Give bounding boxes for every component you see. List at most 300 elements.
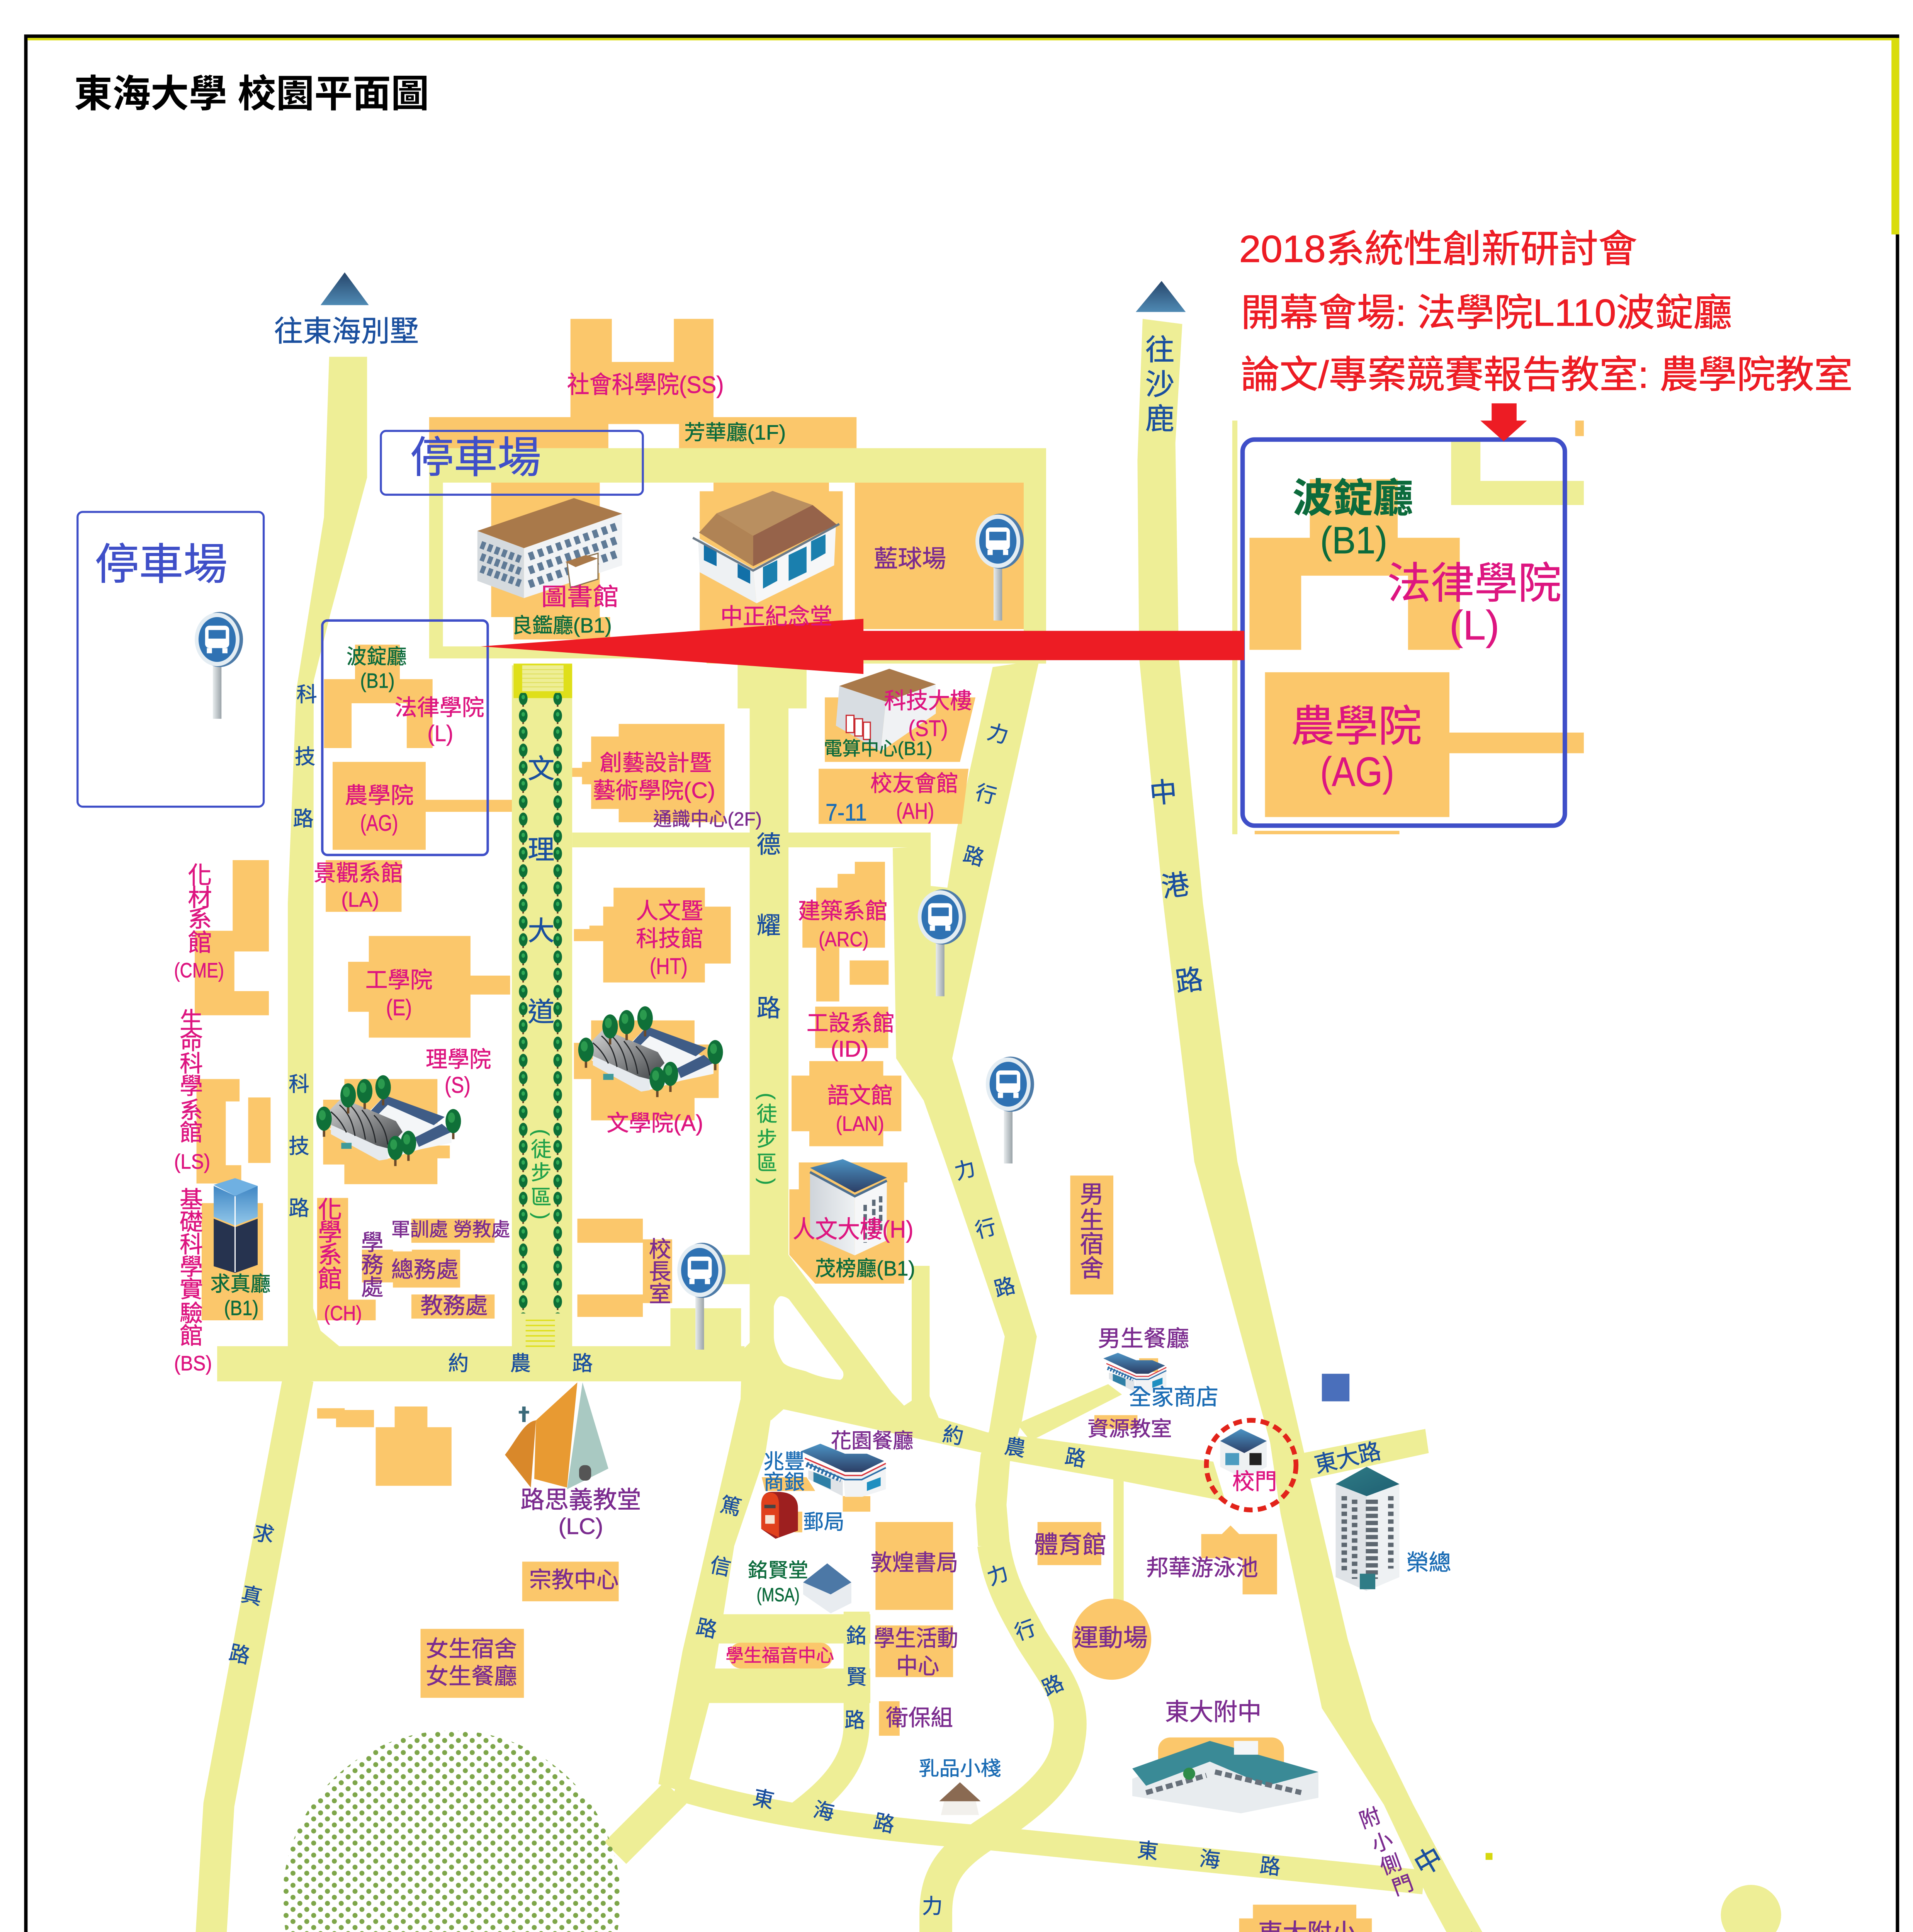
label: 人文暨: 人文暨 bbox=[636, 899, 703, 924]
label: 化學系館: 化 bbox=[318, 1197, 342, 1224]
label: ST: (ST) bbox=[908, 716, 948, 741]
road name: 徒步區 avenue: 徒 bbox=[531, 1138, 552, 1161]
label: CME: (CME) bbox=[174, 959, 224, 982]
label: 化材系館: 館 bbox=[188, 929, 212, 956]
label: 邦華游泳池: 邦華游泳池 bbox=[1146, 1556, 1258, 1580]
road name: 篤信路: 路 bbox=[694, 1616, 719, 1642]
label: 男生宿舍: 舍 bbox=[1080, 1255, 1104, 1282]
building: 軍訓處 bbox=[411, 1219, 494, 1243]
icon: 文學院 temple bbox=[578, 1006, 723, 1097]
icon: 銘賢堂 bbox=[803, 1563, 851, 1613]
road name: 銘賢路: 賢 bbox=[846, 1666, 867, 1689]
road: 文理大道 bbox=[512, 665, 572, 1351]
label: AH: (AH) bbox=[896, 799, 934, 824]
icon: 榮總 tower bbox=[1335, 1467, 1400, 1591]
label: 學生福音中心: 學生福音中心 bbox=[725, 1645, 834, 1665]
building: 學生福音中心 bbox=[729, 1643, 832, 1668]
road: 力行路 north section bbox=[893, 660, 1039, 1546]
label: 良鑑廳: 良鑑廳(B1) bbox=[512, 614, 612, 637]
road: 校長室 spur bbox=[670, 1308, 741, 1351]
label: 波錠廳 B1: (B1) bbox=[360, 670, 395, 692]
road name: 力行路 top: 力 bbox=[985, 721, 1011, 748]
building: 花園餐廳 bbox=[843, 1496, 870, 1512]
road name: 科技路 south: 路 bbox=[289, 1197, 309, 1220]
road name: 徒步區 德耀路: 步 bbox=[756, 1128, 777, 1151]
building: 敦煌書局 bbox=[875, 1522, 953, 1610]
building: 中正紀念堂 bbox=[700, 483, 843, 633]
label: 基礎科學實驗館: 館 bbox=[180, 1323, 203, 1349]
label: 科技大樓: 科技大樓 bbox=[884, 689, 972, 713]
road: 東海路 bbox=[676, 1787, 1424, 1882]
label: 停車場 left: 停車場 bbox=[95, 540, 228, 588]
label: 法律學院: 法律學院 bbox=[395, 696, 484, 720]
building and place labels bbox=[95, 315, 1685, 1932]
building: 人文大樓 bbox=[789, 1162, 907, 1284]
building: 景觀系館 bbox=[326, 860, 401, 912]
label: 藍球場: 藍球場 bbox=[874, 546, 946, 573]
building: 兆豐商銀 bbox=[762, 1477, 815, 1491]
road name: 徒步區 avenue: ) bbox=[530, 1213, 552, 1219]
road name: 東海路 east: 海 bbox=[1198, 1847, 1222, 1872]
road name: 篤信路 bbox=[694, 1493, 743, 1642]
building: 教堂旁 hall bbox=[376, 1406, 452, 1486]
icon: 求真廳 tower bbox=[214, 1178, 258, 1273]
label: 化學系館: 學 bbox=[318, 1219, 342, 1246]
decorative yellow square bbox=[1486, 1853, 1492, 1860]
building: 總務處 bbox=[362, 1250, 460, 1287]
icon: 東大附中 school bbox=[1132, 1741, 1318, 1813]
road name: 力行路 second: 力 bbox=[952, 1156, 978, 1184]
label: LS: (LS) bbox=[174, 1150, 210, 1173]
building: 建築系館 annex bbox=[849, 961, 889, 985]
label: 學務處: 學 bbox=[361, 1230, 384, 1255]
road name: 徒步區 avenue bbox=[530, 1129, 552, 1219]
road name: 約農路 west: 約 bbox=[448, 1352, 469, 1375]
building: 理學院 bbox=[323, 1079, 450, 1184]
road name: 約農路 west: 路 bbox=[572, 1352, 593, 1375]
road: 德耀路 side spur bbox=[717, 1255, 750, 1284]
road: 約農路 east and diagonal bbox=[741, 1255, 1225, 1501]
label: 男生宿舍: 宿 bbox=[1080, 1231, 1104, 1258]
road name: 力行路 second bbox=[952, 1156, 1018, 1301]
callout: conference information bbox=[1239, 228, 1853, 396]
label: 學務處: 處 bbox=[361, 1275, 384, 1300]
label: 文學院: 文學院(A) bbox=[607, 1111, 703, 1136]
inset label 農學院: 農學院 bbox=[1291, 702, 1422, 750]
callout line: paper rooms: 論文/專案競賽報告教室: 農學院教室 bbox=[1241, 354, 1853, 396]
label: 附小側門: 小 bbox=[1369, 1828, 1396, 1857]
label: 郵局: 郵局 bbox=[803, 1511, 844, 1534]
road name: 徒步區 德耀路: ( bbox=[756, 1093, 778, 1100]
building: 語文館 bbox=[792, 1061, 901, 1146]
label: 基礎科學實驗館: 驗 bbox=[180, 1300, 203, 1327]
building: 運動場 bbox=[1072, 1599, 1151, 1680]
label: 生命科學系館: 館 bbox=[180, 1119, 203, 1146]
road name: 文理大道: 文 bbox=[528, 754, 554, 784]
label: 7-11: 7-11 bbox=[826, 799, 867, 826]
label: 體育館: 體育館 bbox=[1034, 1531, 1106, 1558]
road name: 力行路 second: 行 bbox=[973, 1215, 999, 1243]
road name: 徒步區 avenue: ( bbox=[530, 1129, 552, 1136]
inset left edge road bbox=[1232, 420, 1237, 834]
inset 農學院 footprint bbox=[1265, 672, 1584, 817]
road name: 力行路 third bbox=[984, 1561, 1067, 1701]
label: 法律學院 L: (L) bbox=[427, 721, 453, 746]
road name: 東海路 east: 路 bbox=[1259, 1854, 1282, 1879]
label: 語文館: 語文館 bbox=[827, 1083, 893, 1108]
label: 基礎科學實驗館: 科 bbox=[180, 1231, 203, 1258]
label: 波錠廳: 波錠廳 bbox=[347, 645, 407, 668]
文理大道 head plaza bbox=[513, 663, 572, 698]
label: 宗教中心: 宗教中心 bbox=[529, 1568, 619, 1592]
icon: 中正紀念堂 bbox=[693, 491, 839, 603]
road: 篤信路 bbox=[658, 1400, 771, 1793]
label: 中正紀念堂: 中正紀念堂 bbox=[720, 604, 832, 629]
road name: 徒步區 avenue: 步 bbox=[531, 1162, 552, 1184]
building: 衛保組 bbox=[879, 1701, 900, 1736]
building: 生命科學系館 bbox=[197, 1079, 241, 1184]
road: 銘賢堂 south lane bbox=[686, 1682, 870, 1690]
building: 創藝設計暨藝術學院 bbox=[572, 724, 725, 822]
right yellow accent bar bbox=[1891, 38, 1899, 235]
icon: 理學院 temple bbox=[316, 1075, 461, 1166]
label: 建築系館: 建築系館 bbox=[798, 899, 888, 924]
label: 學務處: 務 bbox=[361, 1253, 384, 1277]
buildings: orange footprints bbox=[195, 319, 1372, 1932]
decorative blue square bbox=[1322, 1374, 1349, 1401]
road name: 力行路 fourth: 力 bbox=[922, 1895, 943, 1918]
road: 通識中心 connector bbox=[572, 833, 931, 847]
road name: 東海路 east bbox=[1136, 1839, 1282, 1879]
road name: 求真路 bbox=[227, 1521, 276, 1668]
label: 求真廳: 求真廳 bbox=[210, 1273, 270, 1296]
building: 文學院 bbox=[574, 1020, 719, 1121]
building: 圖書館 bbox=[491, 483, 610, 639]
building: 邦華游泳池 bbox=[1201, 1526, 1277, 1594]
road name: 德耀路: 路 bbox=[756, 995, 781, 1022]
road name: 科技路 south: 技 bbox=[289, 1135, 309, 1158]
road name: 科技路 south: 科 bbox=[289, 1073, 309, 1095]
label: 化學系館: 系 bbox=[318, 1242, 342, 1268]
building: 資源教室 bbox=[1094, 1415, 1137, 1429]
label: 商銀: 商銀 bbox=[763, 1471, 805, 1494]
road: 往東海別墅 / 科技路 bbox=[288, 357, 367, 1351]
inset label AG: (AG) bbox=[1320, 748, 1394, 795]
building: 校友會館 bbox=[819, 769, 968, 824]
road name: 往沙鹿: 鹿 bbox=[1145, 402, 1174, 435]
label: 基礎科學實驗館: 礎 bbox=[180, 1209, 203, 1235]
decorative sun circle bbox=[1721, 1885, 1781, 1932]
road name: 東海路 west: 海 bbox=[811, 1798, 836, 1825]
icon: 男生餐廳 bbox=[1103, 1353, 1166, 1392]
label: 教務處: 教務處 bbox=[421, 1294, 488, 1318]
road name: 徒步區 德耀路: 區 bbox=[756, 1152, 777, 1175]
label: 學生活動: 學生活動 bbox=[874, 1626, 958, 1651]
label: 景觀系館: 景觀系館 bbox=[314, 861, 403, 886]
road name: 力行路 second: 路 bbox=[992, 1274, 1018, 1301]
icon: bus stop 校長室 bbox=[677, 1243, 725, 1350]
inset label 法律學院: 法律學院 bbox=[1387, 559, 1561, 607]
building: 體育館 bbox=[1038, 1522, 1101, 1565]
label: BS: (BS) bbox=[174, 1352, 212, 1375]
label: 化材系館: 化 bbox=[188, 862, 212, 889]
building: 學生活動中心 bbox=[875, 1626, 953, 1677]
road: 約農路 west bbox=[217, 1346, 744, 1381]
label: LC: (LC) bbox=[558, 1514, 603, 1539]
label: 附小側門: 門 bbox=[1389, 1871, 1417, 1900]
road island bbox=[774, 1296, 843, 1380]
roads network bbox=[200, 319, 1753, 1932]
icon: bus stop 建築 bbox=[918, 889, 966, 996]
building: 法學院 small bbox=[324, 645, 433, 748]
building: 教務處 bbox=[411, 1294, 494, 1319]
road name: 約農路 west: 農 bbox=[510, 1352, 531, 1375]
label: 生命科學系館: 系 bbox=[180, 1097, 203, 1123]
icon: bus stop basketball bbox=[975, 514, 1024, 621]
road name: 中港路 south: 中 bbox=[1409, 1841, 1448, 1882]
label: 校長室: 長 bbox=[649, 1260, 671, 1284]
label: 校長室: 校 bbox=[649, 1237, 671, 1262]
label: 東大附中: 東大附中 bbox=[1165, 1699, 1262, 1726]
icon: 乳品小棧 bbox=[939, 1782, 980, 1815]
icon: bus stop 力行路 bbox=[986, 1057, 1034, 1163]
label: 停車場 top: 停車場 bbox=[410, 433, 541, 481]
label: 農學院: 農學院 bbox=[345, 784, 414, 808]
label: 附小側門: 附 bbox=[1356, 1804, 1384, 1833]
dotted green area bbox=[283, 1731, 620, 1932]
road name: 中港路 south bbox=[1409, 1841, 1536, 1932]
icon: 路思義教堂 bbox=[505, 1383, 608, 1489]
inset label L: (L) bbox=[1449, 602, 1499, 648]
road name: 東海路 west bbox=[751, 1786, 897, 1837]
road name: 篤信路: 信 bbox=[708, 1553, 733, 1580]
inset road L bbox=[1451, 438, 1584, 505]
top yellow rule bbox=[27, 38, 1892, 40]
label: 基礎科學實驗館: 學 bbox=[180, 1254, 203, 1280]
label: ID: (ID) bbox=[831, 1037, 868, 1062]
label: 圖書館: 圖書館 bbox=[541, 583, 619, 611]
building: 工設系館 bbox=[815, 1007, 888, 1048]
road name: 往沙鹿: 往 bbox=[1145, 333, 1174, 366]
callout line: opening venue: 開幕會場: 法學院L110波錠廳 bbox=[1241, 291, 1732, 334]
road: 中港路 bbox=[1137, 319, 1753, 1932]
building: 化學系館 bbox=[317, 1198, 376, 1320]
label: 生命科學系館: 科 bbox=[180, 1050, 203, 1077]
building: 教堂旁 small annex bbox=[317, 1408, 374, 1427]
title: 東海大學 校園平面圖 bbox=[74, 73, 429, 115]
road name: 徒步區 德耀路 bbox=[756, 1093, 778, 1185]
label: 通識中心: 通識中心(2F) bbox=[653, 809, 762, 830]
label: HT: (HT) bbox=[650, 954, 688, 979]
road name: 求真路: 真 bbox=[239, 1583, 264, 1609]
label: ARC: (ARC) bbox=[819, 928, 868, 951]
road name: 科技路 north: 路 bbox=[293, 807, 314, 830]
label: 花園餐廳: 花園餐廳 bbox=[831, 1430, 913, 1452]
icon: 花園餐廳 bbox=[801, 1444, 886, 1497]
red down arrow bbox=[1480, 403, 1527, 441]
label: 榮總: 榮總 bbox=[1406, 1551, 1451, 1575]
road name: 中港路 north bbox=[1148, 776, 1205, 998]
road name: 力行路 top: 行 bbox=[973, 781, 999, 808]
road: 求真路 bbox=[200, 1379, 956, 1932]
label: 往東海別墅: 往東海別墅 bbox=[274, 315, 419, 348]
road name: 銘賢路: 路 bbox=[844, 1709, 865, 1731]
label: 化材系館: 系 bbox=[188, 905, 212, 932]
building: 女生宿舍 bbox=[421, 1629, 524, 1698]
label: 校長室: 室 bbox=[649, 1282, 671, 1307]
label: 女生餐廳: 女生餐廳 bbox=[426, 1664, 517, 1689]
road name labels bbox=[227, 333, 1760, 1932]
road name: 力行路 third: 路 bbox=[1039, 1671, 1067, 1701]
inset label 波錠廳: 波錠廳 bbox=[1293, 476, 1413, 520]
label: 總務處: 總務處 bbox=[391, 1257, 459, 1282]
label: LA: (LA) bbox=[341, 888, 379, 911]
label: 男生餐廳: 男生餐廳 bbox=[1098, 1327, 1189, 1351]
road: 圓形綠地 spur bbox=[615, 1793, 676, 1853]
road name: 文理大道: 大 bbox=[528, 916, 554, 946]
road name: 中港路 north: 路 bbox=[1173, 964, 1205, 998]
road name: 力行路 third: 力 bbox=[984, 1561, 1011, 1590]
building: 基礎科學實驗館 bbox=[202, 1203, 263, 1320]
label: 基礎科學實驗館: 基 bbox=[180, 1187, 203, 1213]
road name: 求真路: 求 bbox=[251, 1521, 276, 1548]
label: 生命科學系館: 生 bbox=[180, 1007, 203, 1034]
label: 銘賢堂: 銘賢堂 bbox=[748, 1560, 808, 1582]
building: 人文暨科技館 bbox=[574, 888, 731, 983]
label: E: (E) bbox=[386, 995, 412, 1020]
icon: library bbox=[477, 498, 622, 598]
label: 電算中心: 電算中心(B1) bbox=[824, 738, 933, 759]
road name: 文理大道: 道 bbox=[528, 997, 554, 1027]
label: 資源教室: 資源教室 bbox=[1087, 1418, 1172, 1440]
road: 運動場 spur bbox=[1113, 1479, 1124, 1608]
road name: 科技路 north: 科 bbox=[296, 683, 317, 706]
inset orange tick bbox=[1575, 420, 1584, 436]
label: 工設系館: 工設系館 bbox=[807, 1011, 894, 1036]
label: 農學院 AG: (AG) bbox=[360, 811, 398, 836]
road name: 銘賢路: 銘 bbox=[846, 1624, 867, 1647]
road: 校區外環 bbox=[429, 448, 1046, 663]
label: 軍訓處 勞教處: 軍訓處 勞教處 bbox=[391, 1219, 510, 1240]
building: 東大附小 bbox=[1239, 1905, 1372, 1932]
road: 力行路 middle bbox=[936, 1544, 1070, 1932]
inset 法學院 footprint bbox=[1249, 479, 1460, 650]
building: 社會科學院 bbox=[429, 319, 856, 448]
label: 基礎科學實驗館: 實 bbox=[180, 1276, 203, 1303]
road name: 力行路 third: 行 bbox=[1012, 1616, 1039, 1645]
icon: 郵筒 bbox=[761, 1492, 798, 1539]
road name: 中港路 north: 中 bbox=[1148, 776, 1178, 810]
road: 男生餐廳 spur bbox=[1017, 1384, 1122, 1441]
label: MSA: (MSA) bbox=[756, 1585, 800, 1605]
building: 男生宿舍 bbox=[1070, 1175, 1113, 1294]
parking box: top bbox=[381, 431, 643, 495]
icon: north triangle to Shalu bbox=[1136, 281, 1186, 312]
road name: 徒步區 avenue: 區 bbox=[531, 1186, 552, 1209]
road name: 往沙鹿: 沙 bbox=[1145, 368, 1174, 401]
文理大道 tree rows bbox=[517, 693, 565, 1313]
road name: 篤信路: 篤 bbox=[718, 1493, 743, 1520]
label: 芳華廳: 芳華廳(1F) bbox=[684, 422, 786, 444]
label: CH: (CH) bbox=[324, 1302, 362, 1325]
label: 男生宿舍: 男 bbox=[1080, 1181, 1104, 1208]
road: 東大路 bbox=[1303, 1429, 1429, 1479]
label: 求真廳 B1: (B1) bbox=[224, 1297, 258, 1320]
inset map: 法學院 農學院 bbox=[1232, 420, 1584, 834]
callout line: conference name: 2018系統性創新研討會 bbox=[1239, 228, 1637, 270]
label: 兆豐: 兆豐 bbox=[763, 1451, 805, 1473]
road name: 約農路 east: 農 bbox=[1003, 1435, 1027, 1461]
label: 校友會館: 校友會館 bbox=[870, 772, 958, 796]
inset frame bbox=[1243, 440, 1565, 826]
road name: 求真路: 路 bbox=[227, 1641, 252, 1668]
label: 工學院: 工學院 bbox=[365, 968, 433, 993]
road name: 東海路 west: 路 bbox=[872, 1810, 897, 1837]
label: 生命科學系館: 學 bbox=[180, 1073, 203, 1099]
inset label B1: (B1) bbox=[1320, 519, 1387, 561]
road name: 德耀路: 耀 bbox=[756, 912, 781, 939]
road name: 中港路 north: 港 bbox=[1160, 869, 1191, 903]
icon: 科技大樓 bbox=[836, 669, 936, 752]
road name: 徒步區 德耀路: 徒 bbox=[756, 1103, 777, 1126]
icon: north triangle to villa bbox=[321, 272, 369, 305]
road name: 東海路 west: 東 bbox=[751, 1786, 776, 1813]
label: LAN: (LAN) bbox=[836, 1112, 884, 1135]
label: 化學系館: 館 bbox=[318, 1265, 342, 1293]
road: 銘賢路 bbox=[793, 1612, 856, 1818]
label: 全家商店: 全家商店 bbox=[1129, 1385, 1218, 1410]
red arrow bbox=[481, 619, 1244, 674]
building: 農學院 small bbox=[333, 762, 512, 850]
label: 理學院: 理學院 bbox=[426, 1047, 491, 1072]
label: 男生宿舍: 生 bbox=[1080, 1207, 1104, 1234]
label: 科技館: 科技館 bbox=[636, 927, 703, 951]
inset orange strip bbox=[1255, 831, 1400, 834]
label: 人文大樓: 人文大樓(H) bbox=[793, 1216, 913, 1243]
label: 校門: 校門 bbox=[1232, 1469, 1277, 1494]
label: S: (S) bbox=[445, 1073, 471, 1098]
label: 化材系館: 材 bbox=[188, 884, 212, 912]
building: 建築系館 bbox=[802, 862, 885, 1002]
building: 科技大樓 bbox=[825, 697, 975, 762]
building: 生命科學系館 annex bbox=[248, 1097, 270, 1163]
label: 附小側門: 側 bbox=[1377, 1851, 1404, 1879]
label: 藝術學院: 藝術學院(C) bbox=[593, 778, 715, 803]
road name: 東大路: 東大路 bbox=[1312, 1439, 1383, 1478]
building: 郵局 bbox=[795, 1512, 802, 1532]
highlight box: 法學院 農學院 bbox=[322, 621, 488, 855]
label: 女生宿舍: 女生宿舍 bbox=[426, 1637, 517, 1662]
road: 銘賢堂 north lane bbox=[707, 1626, 870, 1632]
文理大道 foot stripes bbox=[526, 1320, 555, 1346]
label: 敦煌書局: 敦煌書局 bbox=[870, 1551, 958, 1575]
label: 衛保組: 衛保組 bbox=[886, 1706, 953, 1730]
building: 宗教中心 bbox=[522, 1562, 619, 1601]
road name: 徒步區 德耀路: ) bbox=[756, 1178, 778, 1185]
label: 路思義教堂: 路思義教堂 bbox=[520, 1486, 641, 1514]
road name: 文理大道: 理 bbox=[528, 835, 554, 865]
road name: 約農路 east: 約 bbox=[941, 1423, 965, 1449]
icon: bus stop parking bbox=[195, 612, 243, 719]
building: 化材系館 bbox=[195, 860, 269, 1015]
road name: 東海路 east: 東 bbox=[1136, 1839, 1159, 1864]
label: 運動場: 運動場 bbox=[1074, 1624, 1148, 1651]
road name: 力行路 top bbox=[961, 721, 1011, 870]
building: 工學院 bbox=[348, 936, 510, 1037]
label: 創藝設計暨: 創藝設計暨 bbox=[600, 751, 712, 776]
road name: 德耀路: 德 bbox=[756, 831, 781, 858]
icon: 人文大樓 bbox=[810, 1159, 887, 1255]
